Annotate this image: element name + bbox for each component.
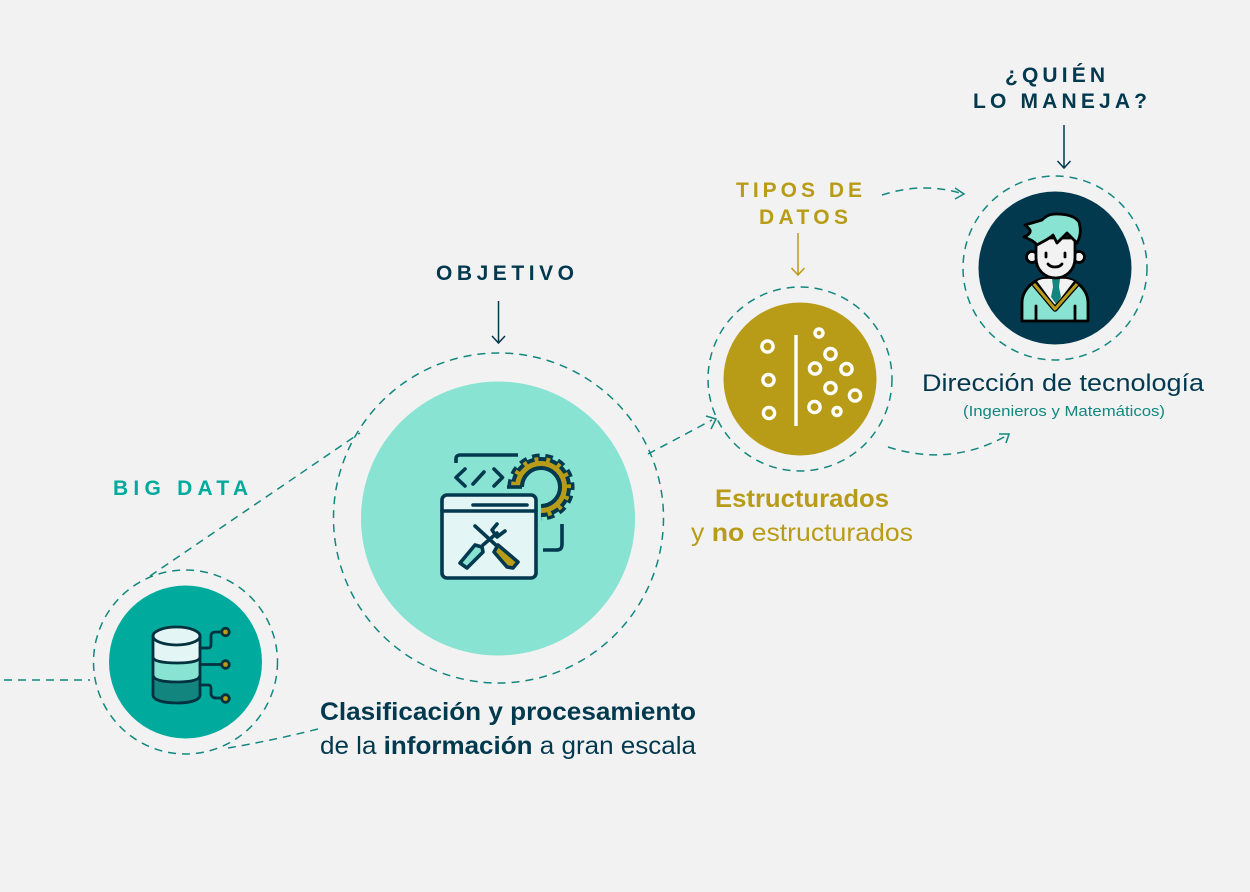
text: Estructurados [691, 485, 913, 547]
text: Dirección de tecnología: Dirección de tecnología [922, 370, 1205, 397]
arrow: Quién lo maneja down [1058, 125, 1070, 168]
icon: window with tools and gear [442, 455, 571, 578]
text: Dirección de tecnología: (Ingenieros y Matemáticos) [963, 403, 1165, 420]
arrow: Estructurados to Dirección de tecnología [888, 434, 1009, 455]
icon: structured and unstructured dots [762, 329, 861, 426]
icon: person [1022, 214, 1088, 321]
heading: Tipos de datos: DATOS [759, 206, 848, 229]
arrow: Tipos de datos down [792, 233, 804, 275]
node: Objetivo [334, 353, 664, 683]
heading: Objetivo: OBJETIVO [436, 262, 574, 285]
node: Big Data [94, 570, 278, 754]
connector: Big Data to Objetivo [150, 433, 360, 576]
gear [507, 457, 571, 517]
arrow: Objetivo down [492, 301, 505, 343]
icon: database [153, 627, 229, 703]
heading: Quién lo maneja: ¿QUIÉN [1005, 64, 1105, 87]
label: Big Data: BIG DATA [113, 477, 248, 500]
text: Dirección de tecnología [922, 370, 1205, 420]
connector: Big Data to Objetivo description [228, 729, 318, 748]
arrow: Tipos de datos to Quién lo maneja [882, 188, 964, 199]
text: Estructurados: Estructurados [715, 485, 889, 513]
text: Objetivo description [320, 698, 696, 760]
text: Estructurados: y no estructurados [691, 519, 913, 547]
heading: Quién lo maneja: LO MANEJA? [973, 90, 1147, 113]
node: Tipos de datos [708, 287, 892, 471]
arrow: Objetivo to Tipos de datos [648, 416, 716, 454]
node: Quién lo maneja [963, 176, 1147, 360]
heading: Tipos de datos [736, 179, 862, 229]
heading: Tipos de datos: TIPOS DE [736, 179, 862, 202]
text: Objetivo description: Clasificación y procesamiento [320, 698, 696, 726]
connector: incoming line to Big Data [4, 679, 90, 681]
heading: Quién lo maneja [973, 64, 1147, 113]
text: Objetivo description: de la información a gran escala [320, 732, 696, 760]
